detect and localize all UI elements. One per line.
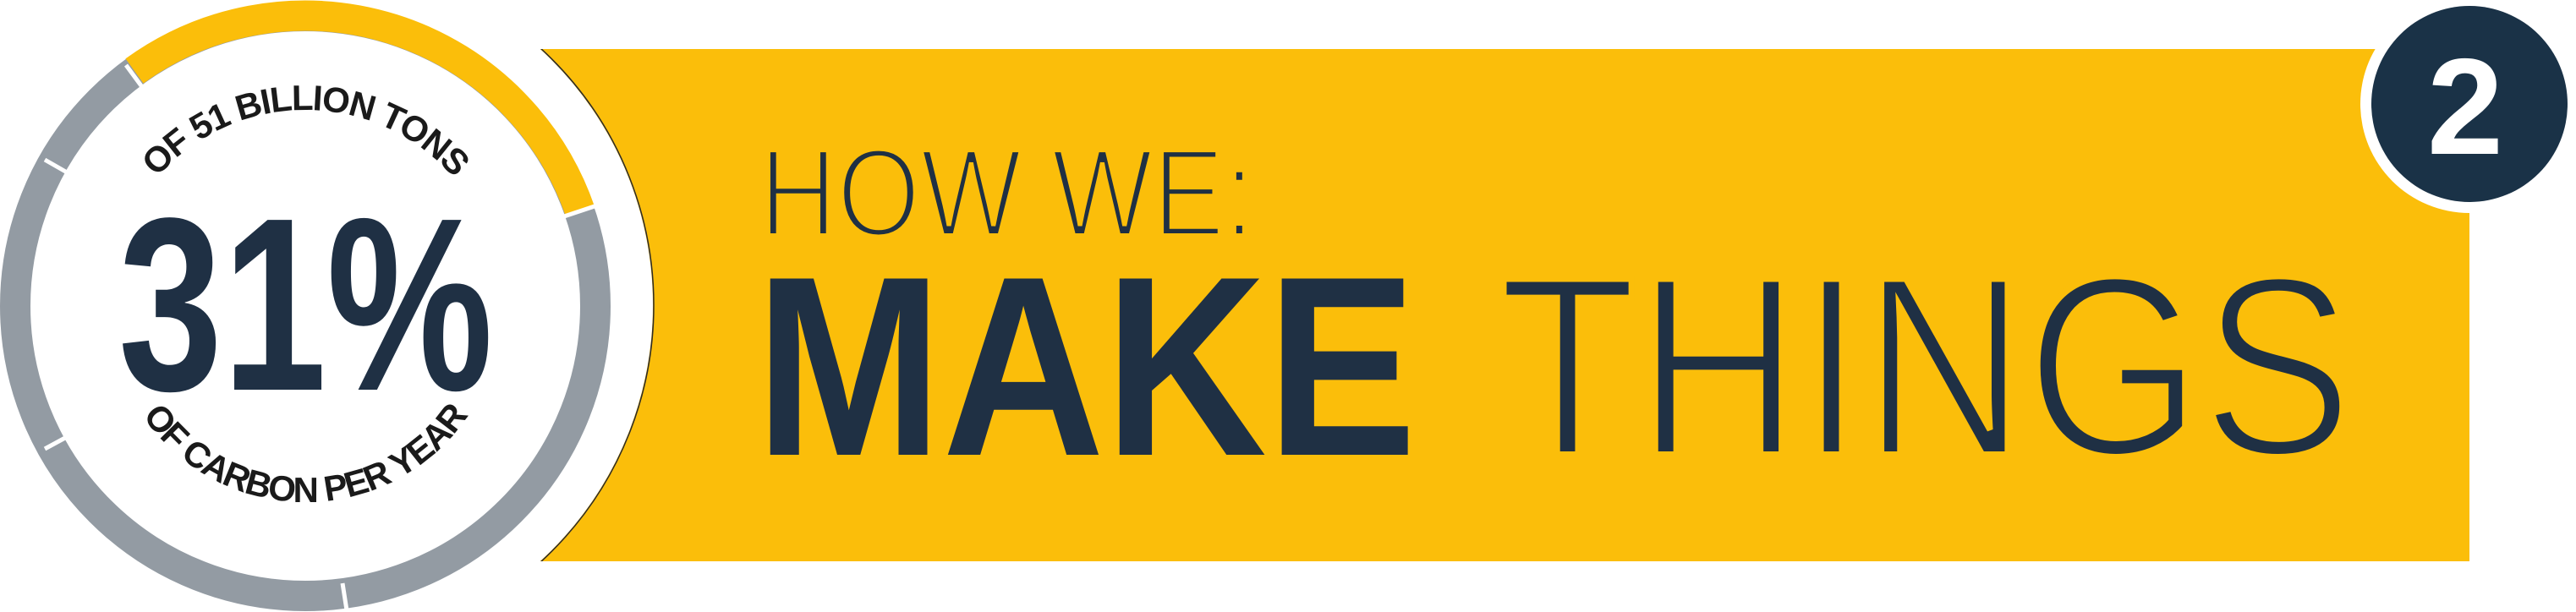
heading: make: MAKE [755,224,1417,510]
stat circle [0,0,611,611]
big percentage: 31% [118,167,493,442]
badge number [2360,0,2576,213]
curved text top: OF 51 BILLION TONS [145,85,469,174]
banner [540,49,2469,561]
curved text bottom: OF CARBON PER YEAR [147,404,469,502]
heading: how we: HOW WE: [759,123,1254,263]
heading: things: THINGS [1499,224,2353,510]
badge number: 2 [2427,30,2503,183]
